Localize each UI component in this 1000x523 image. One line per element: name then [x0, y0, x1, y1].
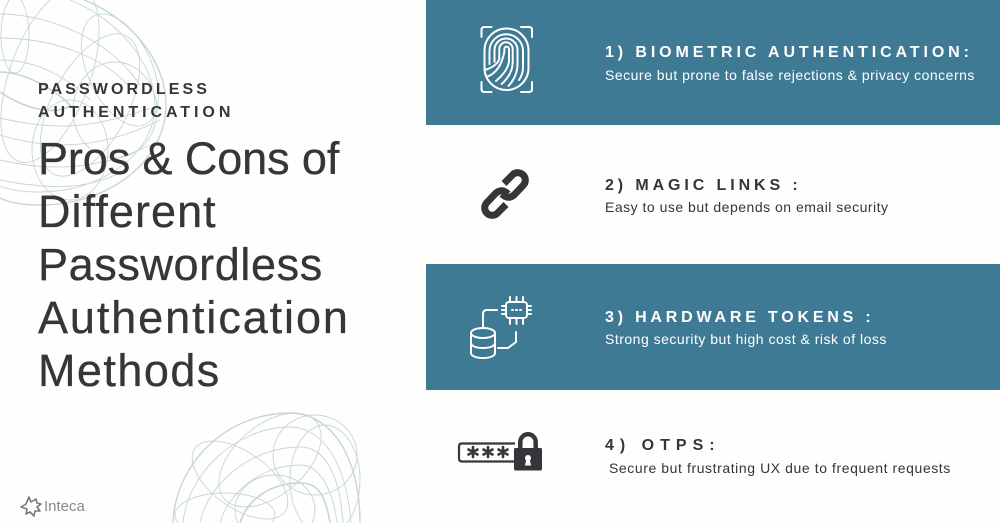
main title [38, 133, 350, 396]
text: magic links: Easy to use but depends on email security [605, 199, 889, 215]
heading: hardware tokens: 3) HARDWARE TOKENS : [605, 309, 874, 326]
panel: biometric authentication [426, 0, 1000, 125]
main title: Authentication [38, 292, 350, 343]
icon: fingerprint [480, 26, 533, 93]
logo: Inteca [20, 496, 85, 517]
text: biometric: Secure but prone to false rejections & privacy concerns [605, 67, 975, 83]
kicker heading: PASSWORDLESS [38, 81, 210, 98]
icon: chain link [481, 169, 529, 219]
panel: hardware tokens [426, 264, 1000, 390]
main title: Pros & Cons of [38, 133, 339, 184]
decorative torus top left [0, 0, 167, 206]
decorative torus bottom [172, 412, 361, 523]
heading: magic links: 2) MAGIC LINKS : [605, 177, 802, 194]
text: otps: Secure but frustrating UX due to frequent requests [609, 460, 951, 476]
logo: Inteca: Inteca [44, 498, 85, 515]
icon: chip and database [470, 296, 532, 359]
icon: password and padlock [458, 432, 542, 470]
main title: Methods [38, 345, 221, 396]
kicker heading [38, 81, 234, 121]
main title: Passwordless [38, 239, 323, 290]
text: hardware tokens: Strong security but high cost & risk of loss [605, 331, 887, 347]
heading: biometric: 1) BIOMETRIC AUTHENTICATION: [605, 44, 973, 61]
kicker heading: AUTHENTICATION [38, 104, 234, 121]
heading: otps: 4) OTPS: [605, 437, 721, 454]
main title: Different [38, 186, 217, 237]
